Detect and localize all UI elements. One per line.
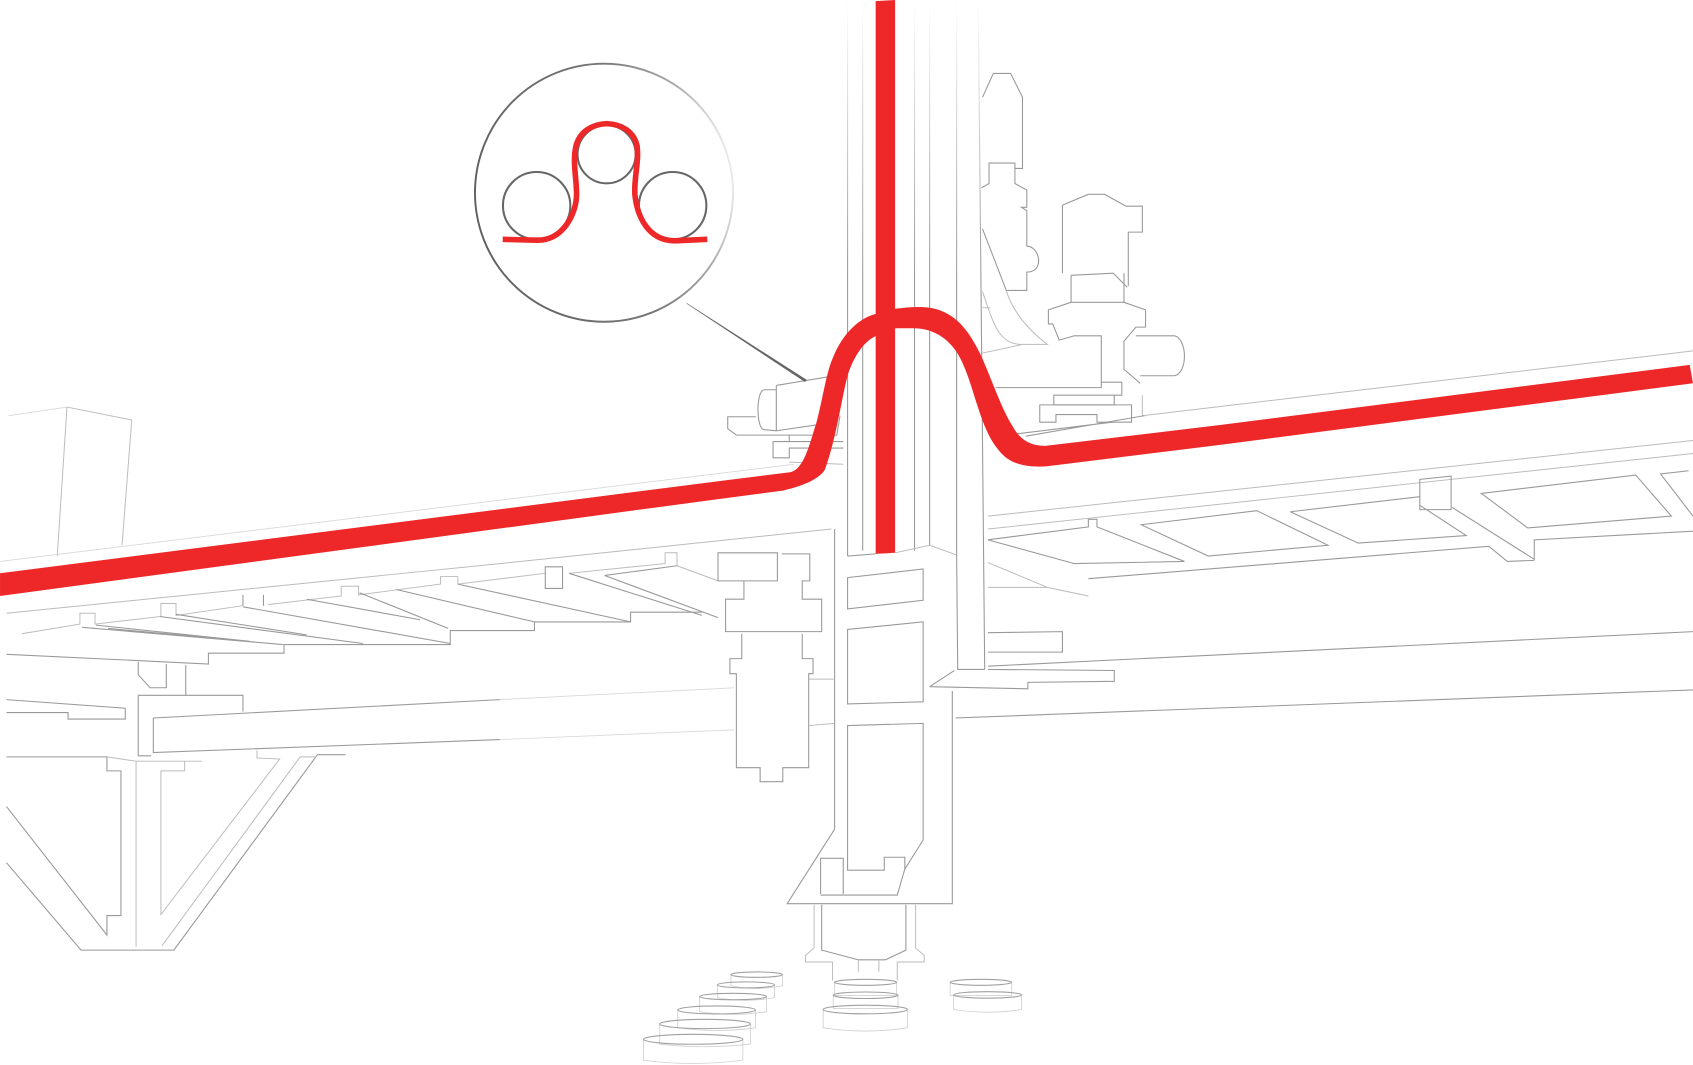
inset red belt xyxy=(503,124,707,241)
left roller housing xyxy=(728,377,843,464)
stacked coins centre xyxy=(823,979,907,1031)
centre left bracket xyxy=(718,553,835,782)
inset outer ring xyxy=(475,64,733,322)
red belt vertical xyxy=(876,0,895,554)
left upper housing xyxy=(9,407,132,556)
red belt main xyxy=(0,307,1693,596)
left beam with brackets xyxy=(0,464,831,664)
stacked coins left xyxy=(644,972,782,1063)
right beams xyxy=(930,351,1693,718)
roller left xyxy=(503,172,570,239)
centre lower frame xyxy=(787,529,952,980)
roller centre xyxy=(578,125,636,183)
left support frame xyxy=(7,662,734,950)
centre column lines xyxy=(848,0,985,669)
roller right xyxy=(639,172,706,239)
leader line xyxy=(687,303,807,382)
inset circle xyxy=(475,64,733,322)
stacked coins right xyxy=(950,979,1022,1012)
upper right machine head xyxy=(981,73,1184,436)
